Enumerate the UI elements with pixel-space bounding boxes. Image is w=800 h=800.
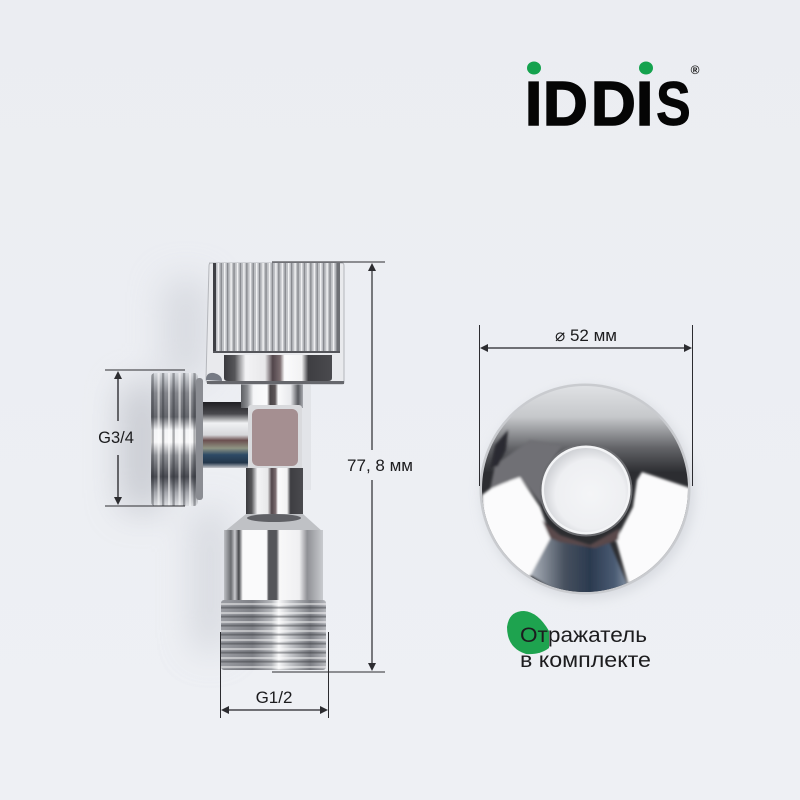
logo: IDDIS: S [656,70,691,139]
valve: G3/4 threaded nut [151,373,203,506]
dimension: 77, 8 мм: 77, 8 мм [347,456,413,475]
infographic canvas [98,62,700,718]
reflector: white lower-left highlight [482,477,551,580]
valve: handle [206,263,344,384]
valve: lower neck [246,468,303,515]
caption: в комплекте [520,649,651,672]
valve: outlet connector [198,402,254,468]
logo: IDDIS: IDDI [525,70,653,139]
logo: IDDIS [525,62,700,139]
valve shadow [122,280,225,650]
valve: neck [241,384,303,408]
valve: lower body [224,530,323,602]
reflector: centre hole [540,444,632,536]
dimension: G1/2: G1/2 [256,688,292,707]
angle valve [151,263,344,670]
valve: square body [248,405,302,471]
dimension: G3/4 [98,370,185,506]
reflector: brushed mid-grey area [489,446,560,506]
valve: waist flare [224,514,323,532]
dimension: G1/2 [220,632,328,718]
caption: Отражатель [520,624,647,647]
logo: IDDIS: ® [691,63,700,77]
reflector shadow [482,387,694,599]
reflector: brown hole shadow [542,520,620,548]
dimension: reflector diameter: ⌀ 52 мм [555,326,617,345]
handle collar [224,355,332,381]
reflector: lower centre reflection [529,537,628,592]
reflector: left dark glint [490,430,508,468]
dimension: 77, 8 мм [272,262,413,672]
dimension: G3/4: G3/4 [98,429,134,447]
valve: G1/2 thread [221,600,326,670]
reflector [480,384,690,600]
dimension: reflector diameter [480,325,692,486]
valve: body edge [300,385,311,490]
caption [520,624,651,672]
reflector: white lower-right highlight [616,472,690,590]
green blob marker [507,611,549,654]
